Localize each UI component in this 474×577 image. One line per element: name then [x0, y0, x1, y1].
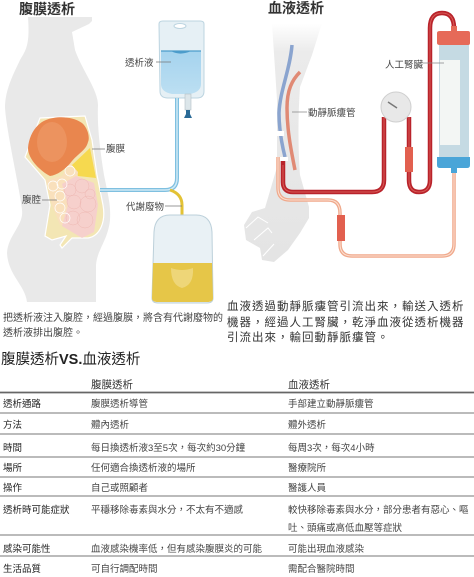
row: symptoms: 較快移除毒素與水分，部分患者有惡心、嘔: [288, 504, 469, 516]
row: infection: 可能出現血液感染: [288, 543, 365, 555]
bag hanger hole: [174, 24, 186, 28]
illustration: peritoneal dialysis: [5, 17, 213, 303]
caption: hemodialysis: 血液透過動靜脈瘻管引流出來，輸送入透析: [227, 299, 464, 313]
arm and hand: [244, 23, 322, 262]
caption: hemodialysis: 引流出來，輸回動靜脈瘻管。: [227, 330, 390, 344]
tape 2: [280, 157, 288, 161]
blue tube: [100, 98, 177, 190]
intestines: pale: [46, 163, 78, 225]
row: operator: 醫護人員: [288, 482, 327, 494]
label lines: [42, 62, 182, 206]
bag shell: [152, 215, 213, 303]
bottom nub: [451, 167, 457, 173]
row: operator: 操作: [3, 482, 23, 494]
return tube core: [278, 157, 454, 256]
heading: peritoneal dialysis: 腹膜透析: [19, 1, 75, 17]
top nub: [451, 26, 457, 32]
row: quality of life: [3, 563, 355, 575]
row: quality of life: 需配合醫院時間: [288, 563, 355, 575]
waste tube: [170, 190, 182, 260]
row: symptoms: [3, 504, 469, 534]
caption: peritoneal dialysis: 透析液排出腹腔。: [3, 326, 83, 339]
header rule: [0, 392, 474, 394]
row: method: 方法: [3, 419, 22, 431]
abdominal cavity: [25, 116, 104, 248]
port cap: [184, 110, 192, 118]
clamp on return tube: [337, 215, 345, 241]
liver highlight: [37, 122, 67, 162]
pressure gauge: [381, 92, 411, 122]
comparison table: [0, 378, 474, 575]
top cap: [437, 31, 470, 45]
liquid highlight: [171, 268, 193, 288]
row: method: 體內透析: [91, 419, 130, 431]
tape 1: [275, 131, 284, 136]
label: fistula: 動靜脈瘻管: [308, 107, 356, 119]
bottom cap: [437, 157, 470, 168]
pale folds: [48, 166, 75, 223]
row: place: 任何適合換透析液的場所: [91, 462, 196, 474]
header row: [91, 378, 330, 391]
row: place: 醫療院所: [288, 462, 327, 474]
dialyzer body: [439, 44, 469, 158]
vein: [279, 45, 292, 157]
gauge needle: [388, 102, 397, 108]
caption: hemodialysis: 機器，經過人工腎臟，乾淨血液從透析機器: [227, 315, 464, 329]
bag shell: [159, 21, 204, 98]
red tube highlight: [283, 13, 454, 192]
artery: [287, 72, 300, 170]
row: method: 體外透析: [288, 419, 327, 431]
label: metabolic waste: 代謝廢物: [126, 201, 165, 213]
row: access: 腹膜透析導管: [91, 398, 149, 410]
caption: hemodialysis: [227, 299, 464, 344]
caption: peritoneal dialysis: [3, 311, 223, 339]
dialyzer fibres: [440, 60, 460, 145]
row: access: [3, 398, 374, 410]
liquid surface: [161, 51, 201, 53]
row: infection: 血液感染機率低，但有感染腹膜炎的可能: [91, 543, 263, 555]
row: method: [3, 419, 327, 431]
return tube: [278, 157, 454, 256]
intestines: pink: [62, 176, 98, 238]
row: quality of life: 可自行調配時間: [91, 563, 158, 575]
illustration: hemodialysis: [244, 13, 470, 262]
row: quality of life: 生活品質: [3, 563, 41, 575]
label lines: [292, 63, 444, 112]
bag liquid: [161, 51, 201, 94]
yellow fold: [72, 148, 96, 178]
red tube circuit: [283, 13, 454, 192]
row: place: 場所: [3, 462, 23, 474]
saline bag: [159, 21, 204, 118]
label: peritoneal cavity: 腹腔: [22, 194, 42, 206]
row: symptoms: 吐、頭痛或高低血壓等症狀: [288, 522, 403, 534]
intestine folds: [64, 179, 96, 228]
header row: 腹膜透析: [91, 378, 133, 391]
row: symptoms: 透析時可能症狀: [3, 504, 70, 516]
row: access: 手部建立動靜脈瘻管: [288, 398, 374, 410]
gauge dial: [381, 92, 411, 122]
waste bag: [152, 215, 213, 303]
label: artificial kidney: 人工腎臟: [385, 59, 424, 71]
header row: 血液透析: [288, 378, 330, 391]
blue tube core: [100, 98, 177, 190]
injection port: [185, 94, 191, 110]
row: infection: 感染可能性: [3, 543, 51, 555]
row: operator: 自己或照顧者: [91, 482, 148, 494]
dialyzer: [437, 26, 470, 173]
row: time: 每日換透析液3至5次，每次約30分鐘: [91, 442, 246, 454]
table rules: [0, 413, 474, 556]
row: infection: [3, 543, 365, 555]
row: symptoms: 平穩移除毒素與水分，不太有不適感: [91, 504, 244, 516]
body silhouette: [5, 17, 110, 302]
fingers: [246, 217, 274, 256]
row: operator: [3, 482, 327, 494]
liver: [28, 117, 89, 176]
row: time: 時間: [3, 443, 22, 454]
clamp on red tube: [405, 147, 413, 172]
row: time: [3, 442, 375, 454]
row: access: 透析通路: [3, 398, 42, 410]
caption: peritoneal dialysis: 把透析液注入腹腔，經過腹膜，將含有代謝廢物的: [3, 311, 223, 324]
comparison title: 腹膜透析VS.血液透析: [1, 351, 140, 368]
label: dialysate: 透析液: [125, 57, 154, 69]
label: peritoneum: 腹膜: [106, 143, 126, 155]
heading: hemodialysis: 血液透析: [268, 0, 324, 16]
row: time: 每周3次，每次4小時: [288, 442, 375, 454]
row: place: [3, 462, 327, 474]
waste liquid: [152, 263, 213, 302]
